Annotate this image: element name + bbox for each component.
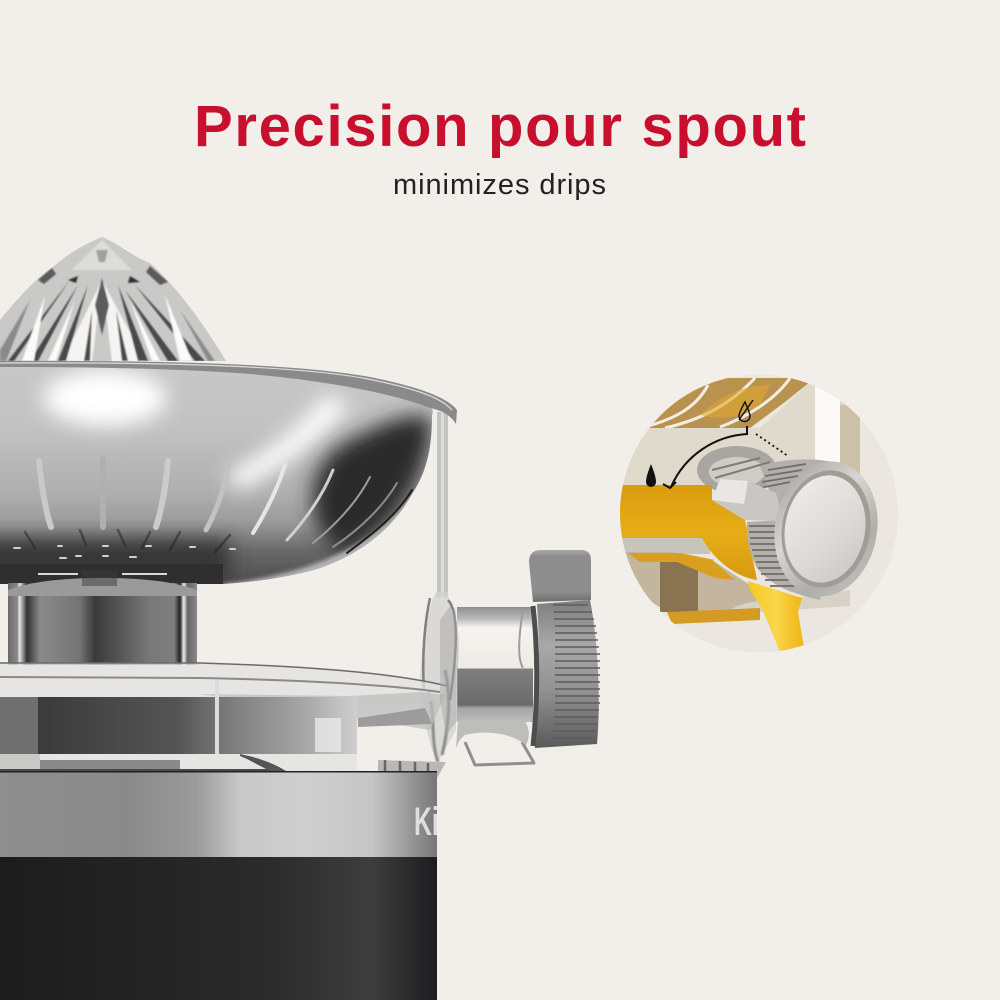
knurled grip [552, 605, 600, 738]
annotation: dotted path [756, 434, 788, 456]
pour spout tube [440, 606, 534, 765]
glass reamer cone [0, 235, 230, 363]
steel dial knob [529, 550, 600, 748]
lower grip ridges [749, 525, 796, 587]
dial body [747, 459, 832, 600]
drip guard [465, 742, 534, 765]
silver base band [0, 771, 461, 857]
steel strainer bowl [0, 360, 460, 595]
annotation: crossed drop icon [739, 400, 753, 422]
glass jar wall [420, 412, 456, 762]
lower glass and housing [620, 538, 850, 624]
bowl rim [0, 361, 457, 424]
strainer slots [14, 459, 412, 558]
knob tab [529, 550, 591, 602]
dial ring [774, 462, 878, 596]
title: Precision pour spout [194, 94, 806, 159]
dark inner housing [0, 680, 357, 770]
juice channel [620, 485, 757, 580]
annotation arrow: arc [663, 426, 747, 488]
subtitle: minimizes drips [393, 169, 606, 201]
glass ledge [0, 663, 447, 730]
upper glass and strainer reflection [623, 378, 860, 485]
dial face [784, 475, 866, 583]
centre post [8, 570, 197, 665]
pouring juice stream [748, 581, 804, 652]
brand badge: Kitc [414, 800, 461, 845]
upper grip ridges [760, 464, 806, 488]
bowl reflections [0, 370, 432, 595]
hex wedge [712, 484, 780, 521]
black motor base [0, 857, 437, 1000]
lower glass rim [0, 754, 446, 780]
juicer illustration [0, 235, 600, 1000]
callout: spout close-up circle [615, 370, 905, 660]
annotation: drop icon [646, 464, 656, 487]
knob collar [535, 600, 599, 748]
glass tube ring [697, 446, 777, 494]
